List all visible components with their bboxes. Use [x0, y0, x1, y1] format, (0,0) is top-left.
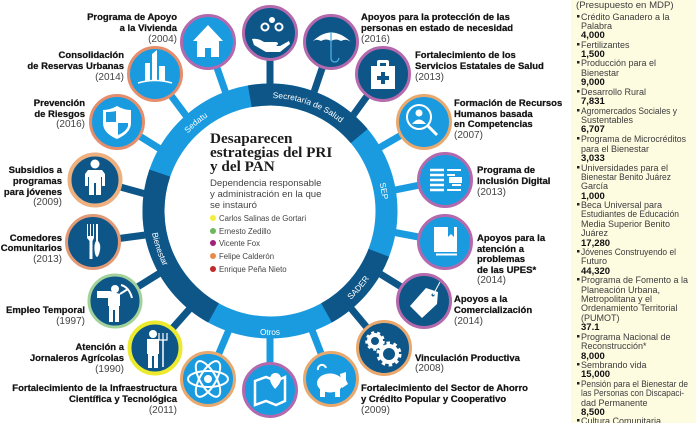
budget side panel: 15,000	[581, 369, 610, 380]
label: Comedores Comunitarios	[1, 233, 62, 265]
label: Atención a Jornaleros Agrícolas: (1990)	[95, 364, 124, 375]
label: Apoyos para la protección: Apoyos para la protección de las	[361, 12, 510, 23]
budget side panel: Media Superior Benito	[581, 219, 670, 229]
label: Prevención de Riesgos: Prevención	[34, 98, 85, 109]
label: Subsidios a programas para jóvenes: Subsidios a	[9, 165, 63, 176]
label: Apoyos para la protección	[361, 12, 513, 45]
budget side panel: 8,500	[581, 407, 605, 418]
label: Empleo Temporal	[6, 305, 85, 327]
label: Comedores Comunitarios: Comedores	[10, 233, 62, 244]
label: Fortalecimiento del Sector de Ahorro: (2009)	[361, 405, 390, 416]
ring label: SADER: SADER	[348, 276, 370, 299]
label: Apoyos para la atención a problemas de las UPES: atención a	[477, 244, 525, 255]
budget side panel: Sustentables	[581, 115, 634, 125]
icon: hand with coins	[244, 6, 296, 60]
icon: piggy bank	[304, 352, 358, 406]
icon: farm worker	[130, 322, 180, 374]
icon: city	[128, 48, 182, 100]
budget side panel: Ordenamiento Territorial	[581, 303, 677, 313]
label: Comedores Comunitarios: (2013)	[33, 254, 62, 265]
label: Programa de Inclusión Digital	[477, 165, 550, 198]
legend: presidents: Enrique Peña Nieto	[219, 265, 287, 274]
budget side panel: Palabra	[581, 21, 612, 31]
label: Subsidios a programas para jóvenes: programas	[13, 176, 62, 187]
ring label: SEP: SEP	[380, 182, 388, 199]
budget side panel: 17,280	[581, 238, 610, 249]
budget side panel: Programa Nacional de	[581, 332, 671, 342]
legend: presidents: Felipe Calderón	[219, 252, 274, 261]
budget side panel: Jóvenes Construyendo el	[581, 247, 676, 257]
budget side panel: 9,000	[581, 77, 605, 88]
budget side panel: 1,000	[581, 191, 605, 202]
icon: fork and spoon	[66, 216, 120, 268]
budget side panel: Pensión para el Bienestar de	[581, 379, 688, 389]
label: Apoyos para la protección: (2016)	[361, 34, 390, 45]
label: Programa de Inclusión Digital: Inclusión Digital	[477, 176, 550, 187]
budget side panel: 3,033	[581, 153, 605, 164]
label: Fortalecimiento del Sector de Ahorro: y Crédito Popular y Cooperativo	[361, 394, 506, 405]
label: Atención a Jornaleros Agrícolas	[30, 342, 125, 375]
icon: shield	[90, 96, 144, 148]
label: Fortalecimiento del Sector de Ahorro	[361, 383, 528, 416]
label: Formación de Recursos Humanos: Formación de Recursos	[454, 98, 562, 109]
label: Apoyos para la atención a problemas de las UPES: problemas	[477, 254, 525, 265]
legend: presidents: Carlos Salinas de Gortari	[219, 214, 306, 223]
icon: price tag	[398, 274, 450, 328]
label: Fortalecimiento de los Servicios Estatales de Salud: Fortalecimiento de los	[415, 50, 516, 61]
icon: house	[182, 16, 234, 68]
budget side panel	[571, 0, 696, 423]
title: Desaparecen	[210, 130, 293, 147]
label: Vinculación Productiva	[415, 353, 521, 374]
label: Fortalecimiento del Sector de Ahorro: Fortalecimiento del Sector de Ahorro	[361, 383, 528, 394]
label: Subsidios a programas para jóvenes	[4, 165, 63, 208]
label: Fortalecimiento de la Infraestructura: Fortalecimiento de la Infraestructura	[12, 383, 178, 394]
budget side panel: Desarrollo Rural	[581, 87, 646, 97]
title: estrategias del PRI	[210, 144, 332, 161]
icon: map pin	[244, 364, 296, 416]
budget side panel: Bienestar	[581, 68, 619, 78]
budget side panel: (PUMOT)	[581, 313, 620, 323]
budget side panel: Programa de Microcréditos	[581, 134, 686, 144]
budget side panel: 7,831	[581, 96, 605, 107]
label: Fortalecimiento de los Servicios Estatales de Salud: Servicios Estatales de Salud	[415, 61, 544, 72]
icon: book	[418, 216, 472, 268]
budget side panel: para el Bienestar	[581, 144, 649, 154]
legend: presidents	[210, 214, 306, 274]
budget side panel: Bienestar Benito Juárez	[581, 172, 671, 182]
label: Empleo Temporal: (1997)	[56, 316, 85, 327]
label: Apoyos para la atención a problemas de las UPES: Apoyos para la	[477, 233, 546, 244]
legend: presidents: Vicente Fox	[219, 239, 260, 248]
ring label: Sedatu: Sedatu	[184, 113, 208, 132]
label: Subsidios a programas para jóvenes: (2009)	[33, 197, 62, 208]
label: Formación de Recursos Humanos: en Competencias	[454, 119, 533, 130]
icon: medical kit	[356, 48, 410, 100]
budget side panel: las Personas con Discapaci-	[581, 388, 684, 398]
title	[210, 130, 332, 175]
label: Apoyos para la atención a problemas de las UPES: de las UPES*	[477, 265, 536, 276]
label: Consolidación de Reservas Urbanas	[27, 50, 124, 83]
subtitle: Dependencia responsable	[210, 178, 321, 189]
icon: digital circuit card	[418, 154, 472, 206]
label: Apoyos para la atención a problemas de las UPES: (2014)	[477, 275, 506, 286]
budget side panel: Futuro	[581, 256, 607, 266]
budget side panel: Metropolitana y el	[581, 294, 652, 304]
label: Apoyos a la Comercialización: Comercialización	[454, 305, 532, 316]
budget side panel: Planeación Urbana,	[581, 285, 660, 295]
ring label: Bienestar: Bienestar	[152, 232, 168, 265]
legend: presidents: Ernesto Zedillo	[219, 227, 272, 236]
label: Vinculación Productiva: (2008)	[415, 363, 444, 374]
budget side panel: dad Permanente	[581, 398, 648, 408]
label: Subsidios a programas para jóvenes: para jóvenes	[4, 187, 62, 198]
budget side panel: Sembrando vida	[581, 360, 647, 370]
label: Empleo Temporal: Empleo Temporal	[6, 305, 85, 316]
budget side panel: 44,320	[581, 266, 610, 277]
label: Apoyos para la atención a problemas de las UPES	[477, 233, 546, 286]
label: Prevención de Riesgos: (2016)	[56, 119, 85, 130]
label: Programa de Apoyo a la Vivienda: a la Vivienda	[120, 23, 178, 34]
ring label: Otros: Otros	[260, 329, 280, 336]
label: Consolidación de Reservas Urbanas: Consolidación	[59, 50, 124, 61]
icon: umbrella	[304, 16, 358, 68]
label: Atención a Jornaleros Agrícolas: Atención a	[75, 342, 125, 353]
label: Formación de Recursos Humanos	[454, 98, 562, 141]
budget side panel: 37.1	[581, 322, 600, 333]
subtitle: se instauró	[210, 200, 257, 211]
label: Apoyos a la Comercialización: (2014)	[454, 316, 483, 327]
budget side panel: Reconstrucción*	[581, 341, 647, 351]
label: Fortalecimiento de la Infraestructura: Científica y Tecnológica	[69, 394, 178, 405]
budget side panel: Programa de Fomento a la	[581, 275, 688, 285]
budget side panel: Juárez	[581, 228, 609, 238]
label: Fortalecimiento de la Infraestructura: (2011)	[149, 405, 177, 416]
label: Atención a Jornaleros Agrícolas: Jornaleros Agrícolas	[30, 353, 124, 364]
label: Apoyos a la Comercialización	[454, 294, 532, 327]
label: Programa de Inclusión Digital: (2013)	[477, 187, 506, 198]
label: Prevención de Riesgos	[34, 98, 85, 130]
label: Consolidación de Reservas Urbanas: de Reservas Urbanas	[27, 61, 124, 72]
budget side panel: Agromercados Sociales y	[581, 106, 677, 116]
label: Consolidación de Reservas Urbanas: (2014)	[95, 72, 124, 83]
budget side panel: Fertilizantes	[581, 40, 630, 50]
budget side panel: 4,000	[581, 30, 605, 41]
title: y del PAN	[210, 158, 275, 175]
label: Apoyos a la Comercialización: Apoyos a la	[454, 294, 508, 305]
budget side panel: 6,707	[581, 124, 605, 135]
icon: gears	[358, 322, 410, 374]
budget side panel: Beca Universal para	[581, 200, 662, 210]
ring label: Secretaría de Salud: Secretaría de Salud	[273, 92, 344, 122]
label: Fortalecimiento de los Servicios Estatales de Salud	[415, 50, 544, 83]
label: Apoyos para la protección: personas en estado de necesidad	[361, 23, 513, 34]
budget side panel: Producción para el	[581, 58, 656, 68]
label: Formación de Recursos Humanos: Humanos basada	[454, 109, 533, 120]
label: Programa de Apoyo a la Vivienda	[87, 12, 178, 45]
label: Comedores Comunitarios: Comunitarios	[1, 243, 62, 254]
icon: atom	[182, 352, 234, 406]
budget side panel: García	[581, 181, 608, 191]
label: Formación de Recursos Humanos: (2007)	[454, 130, 483, 141]
icon: worker with pickaxe	[89, 275, 141, 327]
label: Vinculación Productiva: Vinculación Productiva	[415, 353, 521, 364]
budget side panel: 8,000	[581, 351, 605, 362]
label: Prevención de Riesgos: de Riesgos	[34, 109, 85, 120]
budget side panel: (Presupuesto en MDP)	[576, 0, 674, 11]
connector stalks	[93, 33, 445, 390]
icon: magnifier with person	[398, 96, 450, 148]
label: Programa de Inclusión Digital: Programa de	[477, 165, 535, 176]
icon: young person	[70, 154, 120, 206]
central ring divided by ministry	[153, 94, 386, 328]
subtitle: y administración en la que	[210, 189, 321, 200]
budget side panel: 1,500	[581, 49, 605, 60]
budget side panel: Universidades para el	[581, 163, 668, 173]
label: Fortalecimiento de los Servicios Estatales de Salud: (2013)	[415, 72, 444, 83]
subtitle	[210, 178, 321, 211]
label: Fortalecimiento de la Infraestructura	[12, 383, 178, 416]
budget side panel: Crédito Ganadero a la	[581, 12, 670, 22]
budget side panel: Estudiantes de Educación	[581, 209, 679, 219]
label: Programa de Apoyo a la Vivienda: (2004)	[148, 34, 177, 45]
label: Programa de Apoyo a la Vivienda: Programa de Apoyo	[87, 12, 177, 23]
